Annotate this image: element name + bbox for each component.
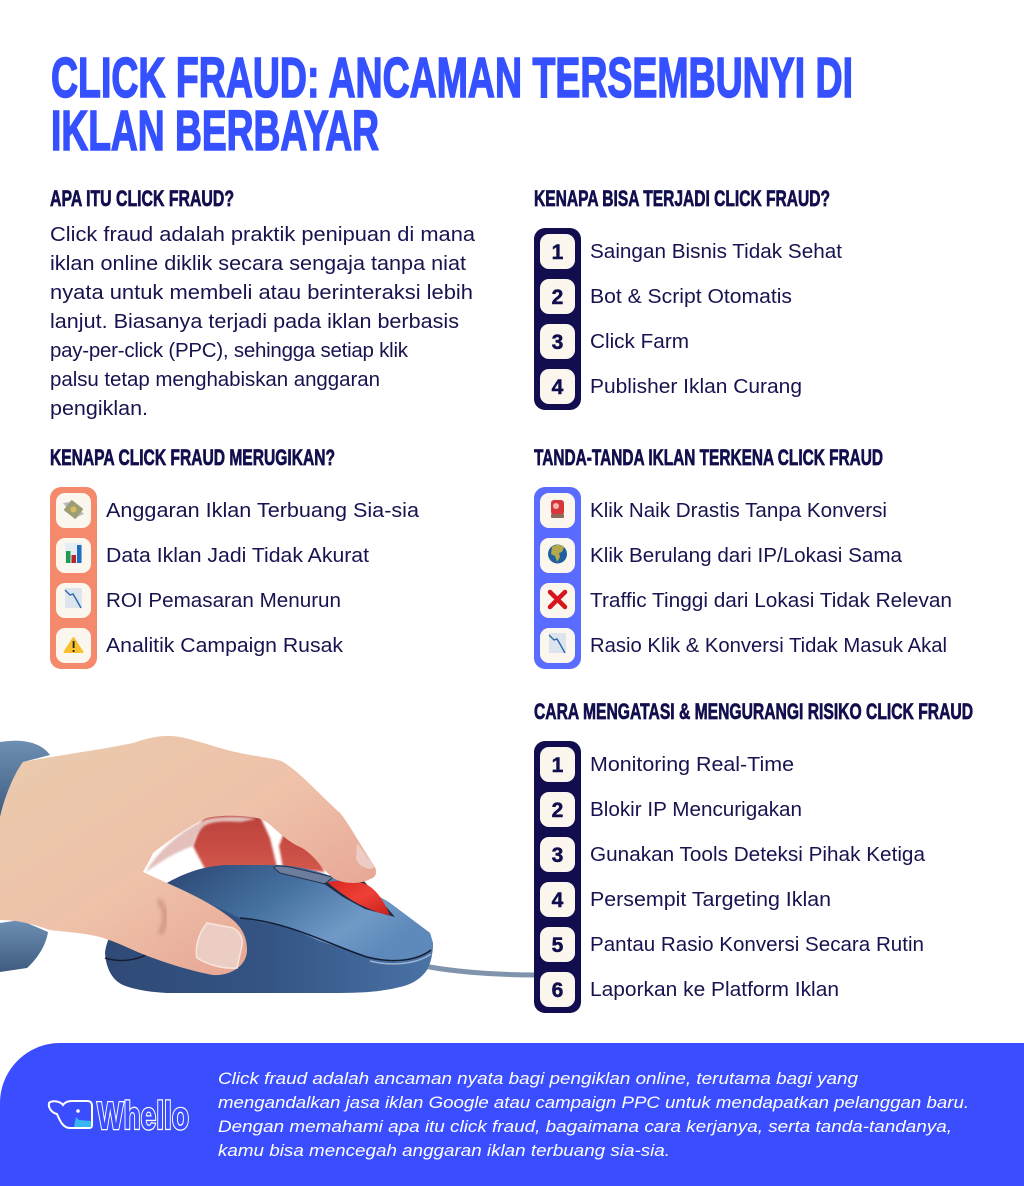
text block: definition: pengiklan. (50, 397, 148, 420)
thumb crease (158, 900, 165, 934)
footer text (218, 1069, 969, 1160)
text block: definition: pay-per-click (PPC), sehingga setiap klik (50, 339, 409, 362)
panel: signs list: Klik Berulang dari IP/Lokasi Sama (590, 544, 903, 567)
icon: falling chart (549, 633, 566, 653)
panel: signs list: Klik Naik Drastis Tanpa Konversi (590, 499, 887, 522)
thumb nail (196, 923, 242, 968)
mouse top shell (167, 865, 433, 962)
icon: money with wings (63, 500, 84, 519)
heading: tanda-tanda: TANDA-TANDA IKLAN TERKENA CLICK FRAUD (534, 445, 883, 470)
mouse body (105, 865, 433, 993)
panel: signs list: Rasio Klik & Konversi Tidak Masuk Akal (590, 634, 947, 657)
panel: solutions list: Gunakan Tools Deteksi Pihak Ketiga (590, 843, 926, 866)
panel: solutions list: Persempit Targeting Iklan (590, 888, 831, 911)
panel: solutions list (534, 741, 926, 1013)
heading: apa itu click fraud: APA ITU CLICK FRAUD? (50, 186, 234, 211)
text block: definition: Click fraud adalah praktik penipuan di mana (50, 223, 476, 246)
heading: kenapa merugikan: KENAPA CLICK FRAUD MERUGIKAN? (50, 445, 335, 470)
title: IKLAN BERBAYAR (51, 99, 379, 163)
logo wordmark: Whello (97, 1095, 189, 1138)
footer text: Click fraud adalah ancaman nyata bagi pengiklan online, terutama bagi yang (218, 1069, 859, 1088)
red button (327, 881, 390, 915)
panel: solutions list: 2 (552, 799, 563, 822)
panel: harms list (50, 487, 420, 669)
footer text: mengandalkan jasa iklan Google atau campaign PPC untuk mendapatkan pelanggan baru. (218, 1093, 969, 1112)
icon: globe (548, 544, 567, 564)
icon: cross (550, 592, 565, 607)
panel: causes list (534, 228, 842, 410)
panel: solutions list: Pantau Rasio Konversi Secara Rutin (590, 933, 924, 956)
panel: harms list: Anggaran Iklan Terbuang Sia-sia (106, 499, 420, 522)
text block: definition: nyata untuk membeli atau berinteraksi lebih (50, 281, 473, 304)
panel: solutions list: 3 (552, 844, 563, 867)
panel: causes list: 4 (552, 376, 564, 399)
panel: solutions list: 1 (552, 754, 564, 777)
footer text: Dengan memahami apa itu click fraud, bagaimana cara kerjanya, serta tanda-tandanya, (218, 1117, 952, 1136)
panel: solutions list: Laporkan ke Platform Iklan (590, 978, 839, 1001)
logo: Whello (49, 1095, 189, 1138)
upper cuff (0, 741, 50, 817)
panel: harms list: ROI Pemasaran Menurun (106, 589, 341, 612)
panel: solutions list: 5 (552, 934, 564, 957)
text block: definition: lanjut. Biasanya terjadi pada iklan berbasis (50, 310, 459, 333)
icon: bar chart (65, 543, 82, 563)
text block: definition (50, 223, 476, 420)
hidden fingers (193, 812, 325, 872)
hand (0, 736, 376, 975)
text block: definition: iklan online diklik secara sengaja tanpa niat (50, 252, 466, 275)
button socket (323, 880, 395, 917)
panel: signs list (534, 487, 952, 669)
finger nail (356, 843, 375, 869)
panel: causes list: 2 (552, 286, 563, 309)
footer text: kamu bisa mencegah anggaran iklan terbuang sia-sia. (218, 1141, 670, 1160)
logo whale (49, 1101, 92, 1128)
panel: causes list: Bot & Script Otomatis (590, 285, 792, 308)
footer panel (0, 1043, 1024, 1186)
mouse seam (105, 918, 431, 961)
mouse cable (424, 966, 536, 975)
text block: definition: palsu tetap menghabiskan anggaran (50, 368, 380, 391)
panel: causes list: Publisher Iklan Curang (590, 375, 802, 398)
title (51, 46, 853, 163)
panel: causes list: Click Farm (590, 330, 689, 353)
illustration: hand on mouse (0, 736, 536, 993)
panel: solutions list: Monitoring Real-Time (590, 753, 794, 776)
panel: causes list: 1 (552, 241, 564, 264)
mouse seam highlight (370, 954, 431, 964)
heading: kenapa bisa terjadi: KENAPA BISA TERJADI CLICK FRAUD? (534, 186, 830, 211)
icon: warning (64, 638, 82, 652)
panel: harms list: Analitik Campaign Rusak (106, 634, 344, 657)
icon: siren (551, 500, 564, 518)
lower cuff (0, 920, 48, 972)
palm inner wall (146, 817, 256, 872)
panel: harms list: Data Iklan Jadi Tidak Akurat (106, 544, 369, 567)
panel: solutions list: Blokir IP Mencurigakan (590, 798, 802, 821)
panel: solutions list: 6 (552, 979, 563, 1002)
panel: causes list: 3 (552, 331, 563, 354)
panel: solutions list: 4 (552, 889, 564, 912)
panel: causes list: Saingan Bisnis Tidak Sehat (590, 240, 842, 263)
panel: signs list: Traffic Tinggi dari Lokasi Tidak Relevan (590, 589, 952, 612)
mouse scroll slot (274, 866, 333, 884)
icon: falling chart (65, 588, 82, 608)
